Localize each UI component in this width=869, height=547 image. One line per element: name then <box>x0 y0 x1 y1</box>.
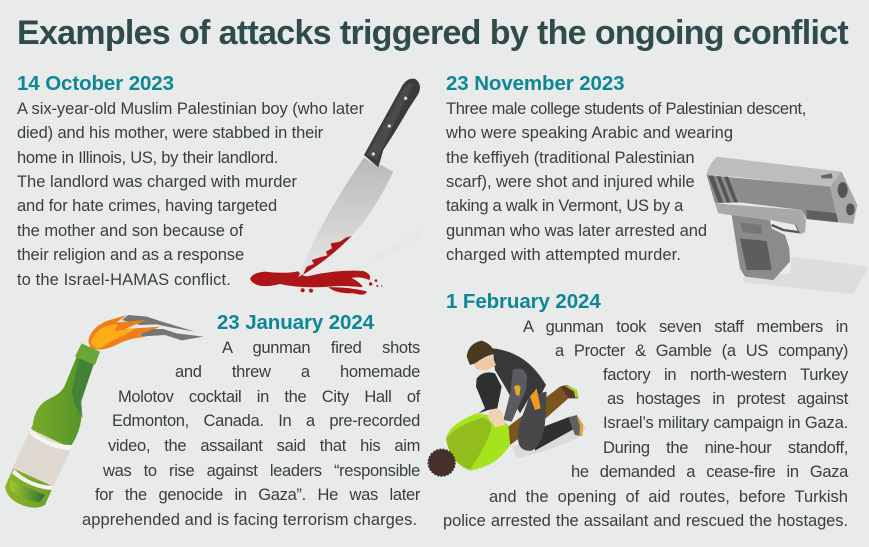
date heading: 23 January 2024 <box>217 311 374 334</box>
text block: their religion and as a response <box>17 246 244 264</box>
text block: gunman who was later arrested and <box>446 222 707 240</box>
panel: 1 February 2024 attack <box>443 290 848 530</box>
text block: and the opening of aid routes, before Turkish <box>489 488 848 506</box>
text block: Three male college students of Palestinian descent, <box>446 100 806 118</box>
icon: Molotov cocktail <box>5 315 203 508</box>
text block <box>443 318 848 530</box>
text block: and threw a homemade <box>175 363 420 381</box>
text block <box>446 100 806 264</box>
text block: The landlord was charged with murder <box>17 173 297 191</box>
text block: and for hate crimes, having targeted <box>17 197 277 215</box>
text block: the mother and son because of <box>17 222 243 240</box>
text block <box>17 100 364 289</box>
text block: factory in north-western Turkey <box>603 366 848 384</box>
text block: as hostages in protest against <box>607 390 848 408</box>
date heading: 23 November 2023 <box>446 72 624 95</box>
text block: was to rise against leaders “responsible <box>103 462 420 480</box>
panel: 23 January 2024 attack <box>82 311 420 529</box>
text block: A gunman fired shots <box>222 339 420 357</box>
text block: Israel’s military campaign in Gaza. <box>603 414 848 432</box>
text block: a Procter & Gamble (a US company) <box>555 342 848 360</box>
text block: During the nine-hour standoff, <box>603 439 848 457</box>
text block: video, the assailant said that his aim <box>108 437 420 455</box>
text block: charged with attempted murder. <box>446 246 681 264</box>
text block <box>82 339 420 529</box>
date heading: 1 February 2024 <box>446 290 601 313</box>
icon: bloody knife <box>250 79 420 295</box>
text block: Molotov cocktail in the City Hall of <box>118 388 420 406</box>
title: Examples of attacks triggered by the ongoing conflict <box>17 14 848 52</box>
panel: 14 October 2023 attack <box>17 72 364 289</box>
text block: apprehended and is facing terrorism charges. <box>82 511 417 529</box>
text block: Edmonton, Canada. In a pre-recorded <box>112 412 420 430</box>
text block: A six-year-old Muslim Palestinian boy (who later <box>17 100 364 118</box>
text block: police arrested the assailant and rescued the hostages. <box>443 512 848 530</box>
text block: the keffiyeh (traditional Palestinian <box>446 149 694 167</box>
date heading: 14 October 2023 <box>17 72 174 95</box>
text block: taking a walk in Vermont, US by a <box>446 197 683 215</box>
text block: who were speaking Arabic and wearing <box>446 124 733 142</box>
panel: 23 November 2023 attack <box>446 72 806 264</box>
text block: he demanded a cease-fire in Gaza <box>571 463 848 481</box>
text block: died) and his mother, were stabbed in their <box>17 124 323 142</box>
text block: to the Israel-HAMAS conflict. <box>17 271 231 289</box>
text block: A gunman took seven staff members in <box>523 318 848 336</box>
text block: for the genocide in Gaza”. He was later <box>95 486 420 504</box>
icon: police officer restraining a person <box>428 341 587 476</box>
text block: home in Illinois, US, by their landlord. <box>17 149 278 167</box>
icon: handgun <box>706 157 869 294</box>
text block: scarf), were shot and injured while <box>446 173 695 191</box>
